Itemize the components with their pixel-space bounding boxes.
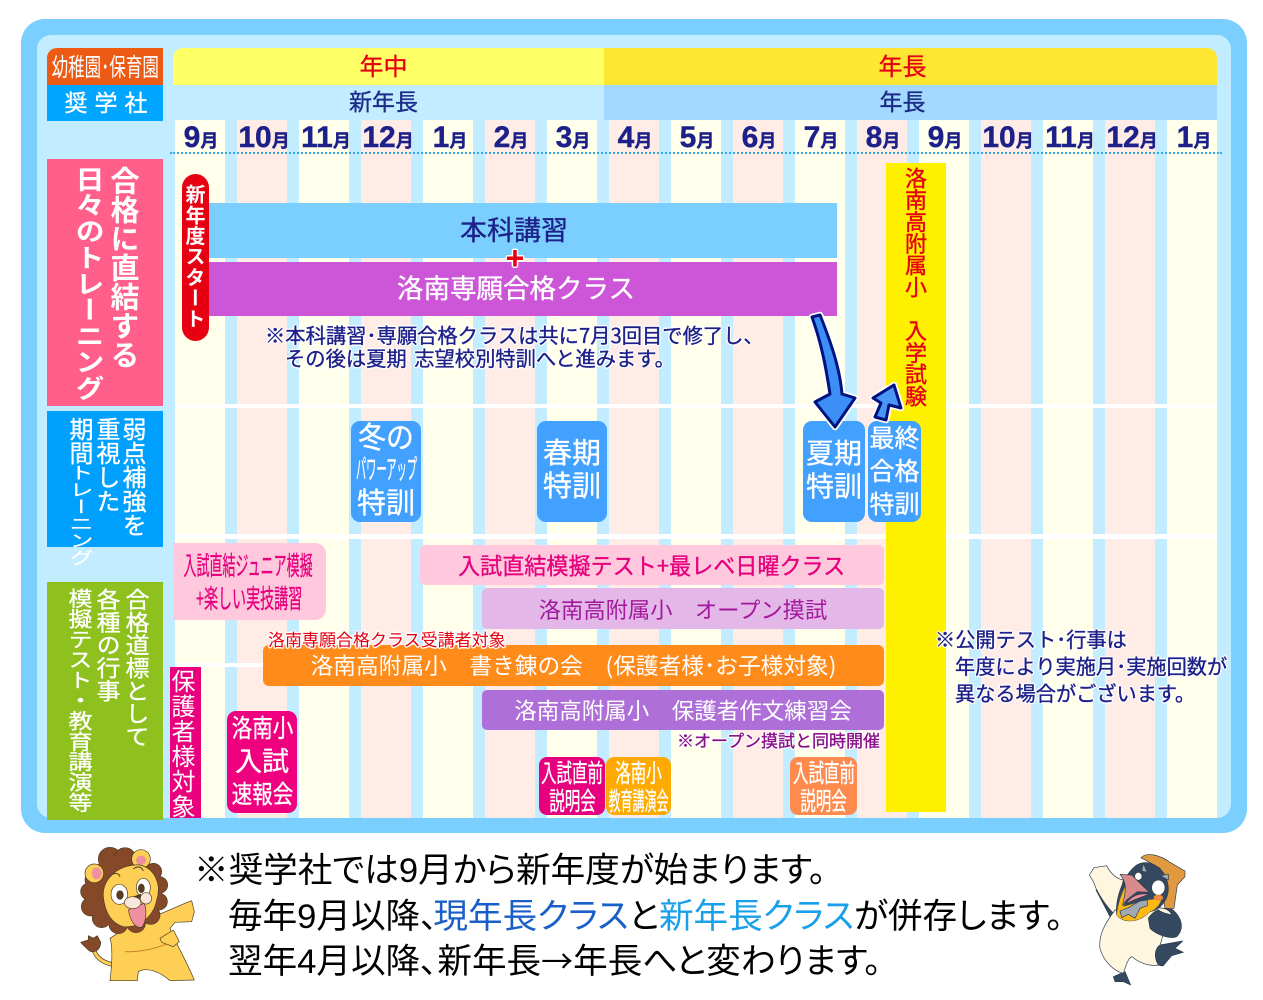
bar: writing practice meeting: 洛南高附属小 書き錬の会 (保護者様･お子様対象): [311, 648, 836, 681]
plus sign: +: [506, 240, 524, 276]
bar: parent writing practice: [482, 690, 884, 730]
tag: for parents: 保護者様対象: [166, 669, 201, 819]
box: info session 2: 入試直前: [793, 754, 855, 790]
panel: intensive training label: 弱点補強を: [117, 417, 152, 537]
inner panel: [37, 35, 1231, 818]
note: public test dates: 年度により実施月･実施回数が: [955, 651, 1227, 680]
box: final training: 合格: [869, 452, 920, 488]
bar: open mock: 洛南高附属小 オープン摸試: [539, 593, 827, 625]
class band: nencho: [604, 85, 1217, 120]
bar: regular course: 本科講習: [460, 209, 568, 248]
panel: intensive training label: [47, 411, 163, 547]
box: final training: 特訓: [869, 484, 920, 520]
panel: events label: [47, 582, 163, 820]
bar: writing practice meeting: [263, 645, 884, 686]
header label: scholarship: [47, 85, 163, 121]
month labels: 11月: [1045, 121, 1095, 154]
bar: rakunan class: 洛南専願合格クラス: [397, 267, 635, 306]
month labels: 12月: [362, 121, 414, 154]
note: public test dates: ※公開テスト･行事は: [935, 624, 1127, 653]
outer frame: [21, 19, 1247, 833]
month labels: 9月: [184, 121, 218, 154]
bar: parent writing practice: 洛南高附属小 保護者作文練習会: [514, 694, 852, 726]
note: public test dates: 異なる場合がございます。: [955, 678, 1195, 707]
box: spring training: 特訓: [543, 463, 601, 505]
panel: intensive training label: 重視した: [91, 417, 126, 513]
icon: lion mascot: [80, 847, 195, 981]
note: open mock same day: ※オープン摸試と同時開催: [677, 727, 880, 752]
box: exam report: 洛南小: [231, 708, 293, 744]
footer text: [194, 852, 1063, 983]
box: spring training: 春期: [543, 430, 601, 472]
panel: events label: 各種の行事: [91, 588, 126, 702]
month labels: 8月: [866, 121, 900, 154]
box: junior mock test: 入試直結ジュニア模擬: [184, 546, 313, 582]
class band: shin-nencho: [173, 85, 604, 120]
box: education lecture: 教育講演会: [609, 782, 669, 818]
note: course completion: ※本科講習･専願合格クラスは共に7月3回目で修了し、: [265, 319, 764, 349]
month labels: 10月: [238, 121, 290, 154]
header label: scholarship: 奨学社: [64, 84, 154, 118]
yellow bar: entrance exam: [886, 163, 946, 812]
header label: kindergarten: 幼稚園･保育園: [51, 48, 159, 84]
panel: events label: 模擬テスト・教育講演等: [63, 588, 98, 812]
bar: mock test and Sunday class: 入試直結模擬テスト+最レベ日曜クラス: [458, 546, 846, 580]
arrow: to summer training: [812, 315, 855, 427]
box: winter training: 特訓: [357, 480, 415, 522]
panel: daily training label: 合格に直結する: [104, 166, 146, 369]
footer text: 翌年4月以降、新年長→年長へと変わります。: [228, 937, 881, 983]
box: spring training: [537, 421, 607, 522]
month labels: 6月: [742, 121, 776, 154]
box: info session 1: 説明会: [549, 782, 595, 818]
box: winter training: [351, 421, 421, 522]
yellow bar: entrance exam: 洛南高附属小 入学試験: [900, 167, 932, 407]
month labels: 4月: [618, 121, 652, 154]
month labels: [184, 121, 1211, 154]
bar: rakunan class: [209, 262, 837, 316]
box: info session 1: 入試直前: [541, 754, 603, 790]
grade band: nenchu: 年中: [360, 46, 408, 82]
box: exam report: [227, 711, 297, 813]
box: final training: [868, 421, 921, 522]
icon: penguin mascot: [1089, 854, 1186, 986]
month labels: 12月: [1106, 121, 1158, 154]
arrow: to exam: [873, 385, 901, 420]
panel: intensive training label: 期間: [64, 417, 99, 465]
month labels: 5月: [680, 121, 714, 154]
pill: new year start: 新年度スタート: [181, 184, 210, 329]
bar: regular course: [209, 203, 837, 258]
box: info session 1: [539, 757, 605, 815]
month labels: 1月: [433, 121, 467, 154]
class band: shin-nencho: 新年長: [349, 83, 418, 117]
grade band: nenchu: [173, 48, 604, 85]
box: winter training: 冬の: [358, 413, 414, 457]
panel: daily training label: [47, 159, 163, 406]
month labels: 10月: [982, 121, 1034, 154]
box: education lecture: [606, 757, 671, 815]
box: summer training: 特訓: [806, 465, 862, 505]
month labels: 3月: [556, 121, 590, 154]
grade band: nencho: [604, 48, 1217, 85]
class band: nencho: 年長: [880, 83, 926, 117]
arrows: [808, 312, 904, 430]
panel: events label: 合格道標として: [120, 588, 155, 748]
month labels: 9月: [928, 121, 962, 154]
box: summer training: 夏期: [806, 432, 862, 472]
grade band: nencho: 年長: [878, 46, 926, 82]
month labels: 2月: [494, 121, 528, 154]
footer text: 毎年9月以降、現年長クラスと新年長クラスが併存します。: [228, 898, 1063, 936]
box: info session 2: 説明会: [800, 782, 847, 818]
panel: daily training label: 日々のトレーニング: [69, 166, 111, 401]
note: public test dates: [935, 624, 1228, 707]
box: info session 2: [790, 757, 857, 815]
box: junior mock test: [173, 543, 326, 620]
month labels: 7月: [804, 121, 838, 154]
box: final training: 最終: [869, 419, 920, 455]
box: summer training: [803, 421, 865, 522]
box: junior mock test: +楽しい実技講習: [196, 578, 303, 616]
bar: open mock: [482, 588, 884, 629]
box: exam report: 速報会: [231, 774, 293, 810]
month labels: 1月: [1177, 121, 1211, 154]
box: education lecture: 洛南小: [615, 754, 662, 790]
note: class attendees: 洛南専願合格クラス受講者対象: [268, 626, 506, 651]
month labels: 11月: [301, 121, 351, 154]
panel: intensive training label: トレーニング: [64, 464, 99, 566]
box: exam report: 入試: [235, 740, 289, 778]
note: course completion: [265, 319, 764, 372]
box: winter training: パワーアップ: [355, 448, 417, 487]
note: course completion: その後は夏期 志望校別特訓へと進みます。: [285, 342, 675, 372]
footer text: ※奨学社では9月から新年度が始まります。: [194, 852, 826, 890]
